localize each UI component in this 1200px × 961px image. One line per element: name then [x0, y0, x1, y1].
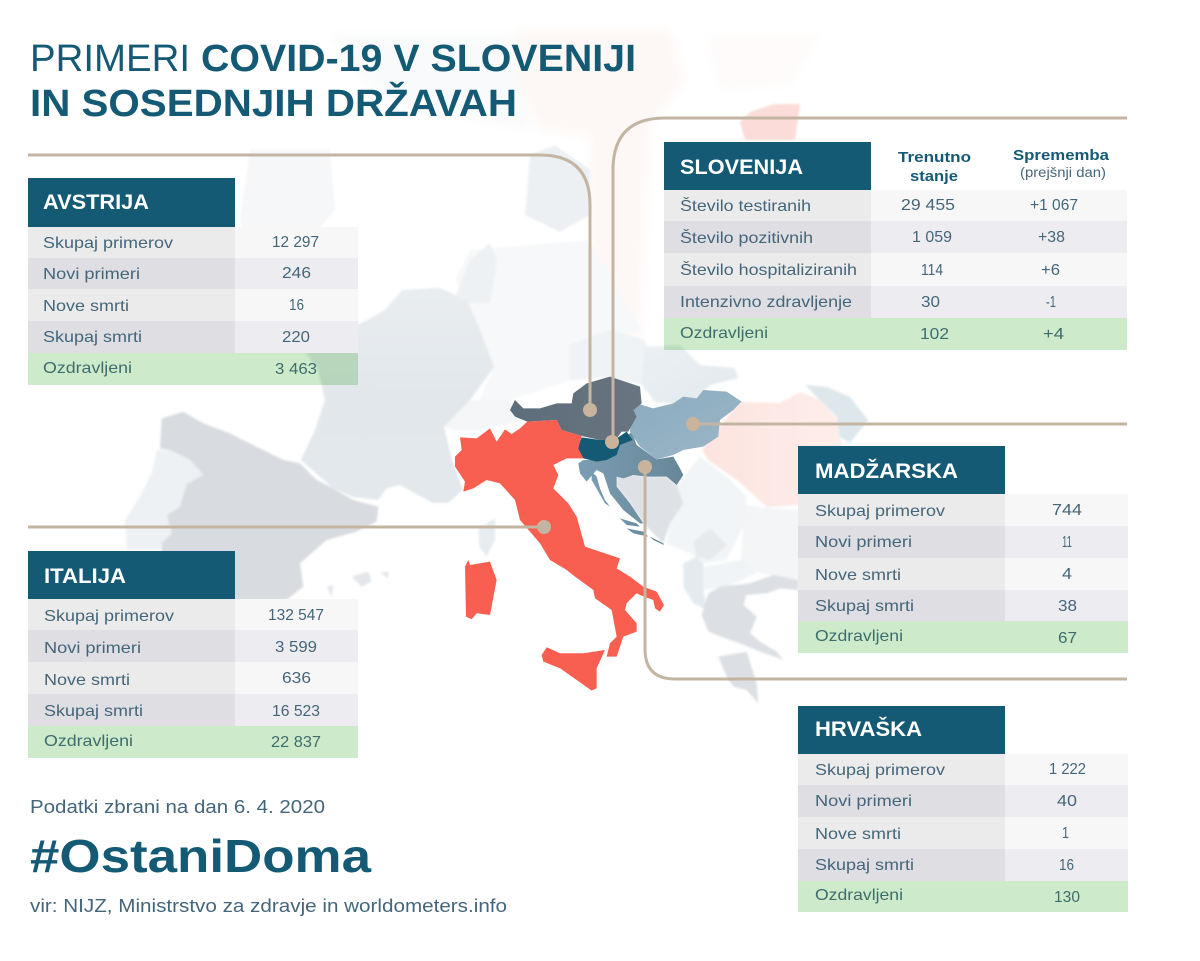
country: Italy: [455, 420, 664, 691]
row: Intenzivno zdravljenje: [664, 286, 1127, 318]
row: Nove smrti: Nove smrti: [815, 567, 901, 584]
header: Slovenija: SLOVENIJA: [680, 156, 803, 179]
row: Ozdravljeni: 3 463: [275, 361, 317, 378]
row: Ozdravljeni: [28, 726, 358, 758]
row: Skupaj smrti: [28, 321, 358, 353]
connector line: Hungary: [686, 417, 1127, 431]
row: Skupaj smrti: Skupaj smrti: [43, 329, 142, 346]
Czech Republic, faint: [570, 330, 650, 385]
row: Ozdravljeni: Ozdravljeni: [44, 733, 133, 750]
Switzerland: [444, 400, 525, 430]
panel: Slovenia: [664, 142, 1127, 350]
row: Število pozitivnih: Število pozitivnih: [680, 228, 813, 247]
Scandinavia, Finland and eastern Europe, very faint: [330, 30, 820, 340]
date note: Podatki zbrani na dan 6. 4. 2020: [30, 797, 325, 817]
row: Število pozitivnih: 1 059: [912, 229, 952, 246]
row: Ozdravljeni: 22 837: [271, 734, 321, 751]
row: Novi primeri: 40: [1057, 793, 1077, 810]
title: [30, 38, 636, 125]
column heading: Sprememba (prejšnji dan): [1013, 147, 1110, 180]
Corsica: [478, 518, 495, 557]
row: Skupaj primerov: 1 222: [1049, 761, 1086, 778]
Bosnia: [617, 475, 683, 543]
header: Avstrija: [28, 178, 235, 227]
row: Skupaj smrti: [798, 590, 1128, 621]
row: Nove smrti: [28, 289, 358, 321]
row: Novi primeri: [798, 785, 1128, 817]
row: Novi primeri: 246: [282, 265, 311, 282]
row: Novi primeri: 3 599: [275, 639, 317, 656]
header: Italija: ITALIJA: [44, 565, 126, 588]
row: Skupaj smrti: [798, 849, 1128, 881]
Belgium: [400, 288, 465, 322]
row: Novi primeri: 11: [1062, 534, 1072, 551]
row: Skupaj primerov: [28, 599, 358, 630]
row: Skupaj smrti: 16 523: [272, 703, 320, 720]
row: Skupaj primerov: Skupaj primerov: [44, 608, 174, 625]
row: Ozdravljeni: [798, 881, 1128, 912]
row: Število hospitaliziranih: +6: [1041, 262, 1060, 279]
row: Ozdravljeni: [664, 318, 1127, 350]
row: Ozdravljeni: Ozdravljeni: [815, 887, 903, 904]
row: Nove smrti: [28, 662, 358, 694]
panel: Hungary: [798, 446, 1128, 653]
connector line: Italy: [28, 520, 551, 534]
column heading: Sprememba (prejšnji dan): Sprememba: [1013, 147, 1110, 164]
header: Hrvaška: HRVAŠKA: [815, 717, 922, 741]
header: Italija: [28, 551, 235, 599]
Portugal: [125, 450, 203, 550]
Great Britain, faint: [240, 150, 335, 260]
Romania: [702, 392, 842, 507]
Kosovo: [693, 528, 727, 560]
row: Skupaj primerov: [798, 754, 1128, 785]
row: Novi primeri: [28, 258, 358, 289]
header: Hrvaška: [798, 706, 1005, 754]
row: Skupaj primerov: [28, 227, 358, 258]
row: Novi primeri: Novi primeri: [815, 793, 912, 810]
row: Skupaj primerov: [798, 494, 1128, 526]
row: Ozdravljeni: 67: [1058, 630, 1077, 647]
country: Croatia: [578, 432, 683, 545]
row: Nove smrti: Nove smrti: [44, 672, 130, 689]
Greece mainland: [702, 575, 798, 660]
row: Skupaj smrti: Skupaj smrti: [44, 703, 143, 720]
connector line: Slovenia: [605, 118, 1127, 449]
row: Intenzivno zdravljenje: Intenzivno zdravljenje: [680, 294, 852, 311]
row: Število hospitaliziranih: [664, 253, 1127, 286]
row: Skupaj primerov: Skupaj primerov: [43, 235, 173, 252]
connector line: Croatia: [638, 460, 1127, 679]
Netherlands: [453, 243, 497, 303]
row: Skupaj primerov: 12 297: [272, 234, 319, 251]
row: Število pozitivnih: +38: [1038, 229, 1065, 246]
row: Število testiranih: 29 455: [901, 197, 955, 214]
row: Novi primeri: Novi primeri: [815, 534, 912, 551]
row: Nove smrti: 4: [1062, 566, 1072, 583]
row: Ozdravljeni: +4: [1043, 326, 1064, 343]
row: Ozdravljeni: Ozdravljeni: [815, 628, 903, 645]
header: Madžarska: MADŽARSKA: [815, 459, 958, 483]
country: Slovenia: [577, 432, 633, 462]
row: Nove smrti: 16: [289, 297, 304, 314]
column heading: Trenutno stanje: stanje: [910, 168, 958, 185]
row: Nove smrti: [798, 817, 1128, 849]
row: Skupaj primerov: 744: [1052, 502, 1082, 519]
row: Število pozitivnih: [664, 221, 1127, 253]
row: Ozdravljeni: 130: [1054, 889, 1080, 906]
row: Ozdravljeni: [28, 353, 358, 385]
Balkans, in zoomed detail coordinates: [478, 457, 757, 610]
country: Hungary: [630, 390, 742, 459]
title: IN SOSEDNJIH DRŽAVAH: [30, 81, 517, 125]
row: Število testiranih: [664, 190, 1127, 221]
title: COVID-19 V SLOVENIJI: [201, 38, 636, 80]
Peloponnese: [718, 652, 758, 703]
panel: Croatia: [798, 706, 1128, 912]
row: Nove smrti: [798, 558, 1128, 590]
country: Austria: [510, 377, 642, 440]
Slovakia: [642, 345, 738, 405]
highlighted countries: [455, 377, 742, 691]
background map of Europe: [125, 30, 868, 703]
row: Število testiranih: +1 067: [1030, 197, 1078, 214]
row: Število testiranih: Število testiranih: [680, 196, 811, 215]
row: Intenzivno zdravljenje: -1: [1046, 294, 1056, 311]
Bulgaria, faint: [740, 505, 800, 580]
row: Nove smrti: 1: [1062, 825, 1069, 842]
row: Ozdravljeni: Ozdravljeni: [43, 360, 132, 377]
row: Število hospitaliziranih: Število hospitaliziranih: [680, 260, 857, 279]
header: Madžarska: [798, 446, 1005, 494]
row: Novi primeri: [798, 526, 1128, 558]
column heading: Trenutno stanje: Trenutno: [898, 149, 971, 166]
row: Intenzivno zdravljenje: 30: [921, 294, 940, 311]
row: Ozdravljeni: Ozdravljeni: [680, 325, 768, 342]
source note: vir: NIJZ, Ministrstvo za zdravje in worldometers.info: [30, 896, 507, 916]
Spain: [125, 412, 388, 600]
Denmark: [525, 145, 590, 232]
panel: Italy: [28, 551, 358, 758]
Germany and central Europe, faint: [455, 240, 640, 400]
row: Novi primeri: Novi primeri: [44, 640, 141, 657]
Albania: [683, 557, 707, 610]
header: Slovenija: [664, 142, 871, 190]
connector line: Austria: [28, 155, 597, 417]
row: Skupaj smrti: Skupaj smrti: [815, 857, 914, 874]
row: Nove smrti: Nove smrti: [815, 826, 901, 843]
row: Ozdravljeni: [798, 621, 1128, 653]
row: Novi primeri: [28, 630, 358, 662]
row: Skupaj smrti: 16: [1059, 857, 1074, 874]
header: Avstrija: AVSTRIJA: [43, 191, 149, 214]
row: Novi primeri: Novi primeri: [43, 266, 140, 283]
title: PRIMERI: [30, 38, 190, 80]
hashtag: #OstaniDoma: [30, 830, 371, 882]
row: Nove smrti: Nove smrti: [43, 298, 129, 315]
panel: Austria: [28, 178, 358, 385]
Serbia: [667, 457, 747, 563]
row: Skupaj smrti: Skupaj smrti: [815, 598, 914, 615]
North Macedonia: [703, 560, 757, 590]
row: Skupaj primerov: Skupaj primerov: [815, 503, 945, 520]
row: Skupaj smrti: 220: [282, 329, 310, 346]
row: Skupaj smrti: [28, 694, 358, 726]
row: Ozdravljeni: 102: [920, 326, 949, 343]
Estonia: [740, 104, 800, 140]
Balearic islands: [327, 572, 388, 597]
column heading: Trenutno stanje: [898, 149, 971, 185]
row: Nove smrti: 636: [282, 670, 311, 687]
Moldova: [805, 385, 868, 443]
France: [300, 288, 494, 503]
column heading: Sprememba (prejšnji dan): (prejšnji dan): [1020, 165, 1106, 180]
row: Skupaj primerov: 132 547: [268, 607, 324, 624]
row: Skupaj primerov: Skupaj primerov: [815, 762, 945, 779]
row: Število hospitaliziranih: 114: [921, 262, 943, 279]
row: Skupaj smrti: 38: [1058, 598, 1077, 615]
